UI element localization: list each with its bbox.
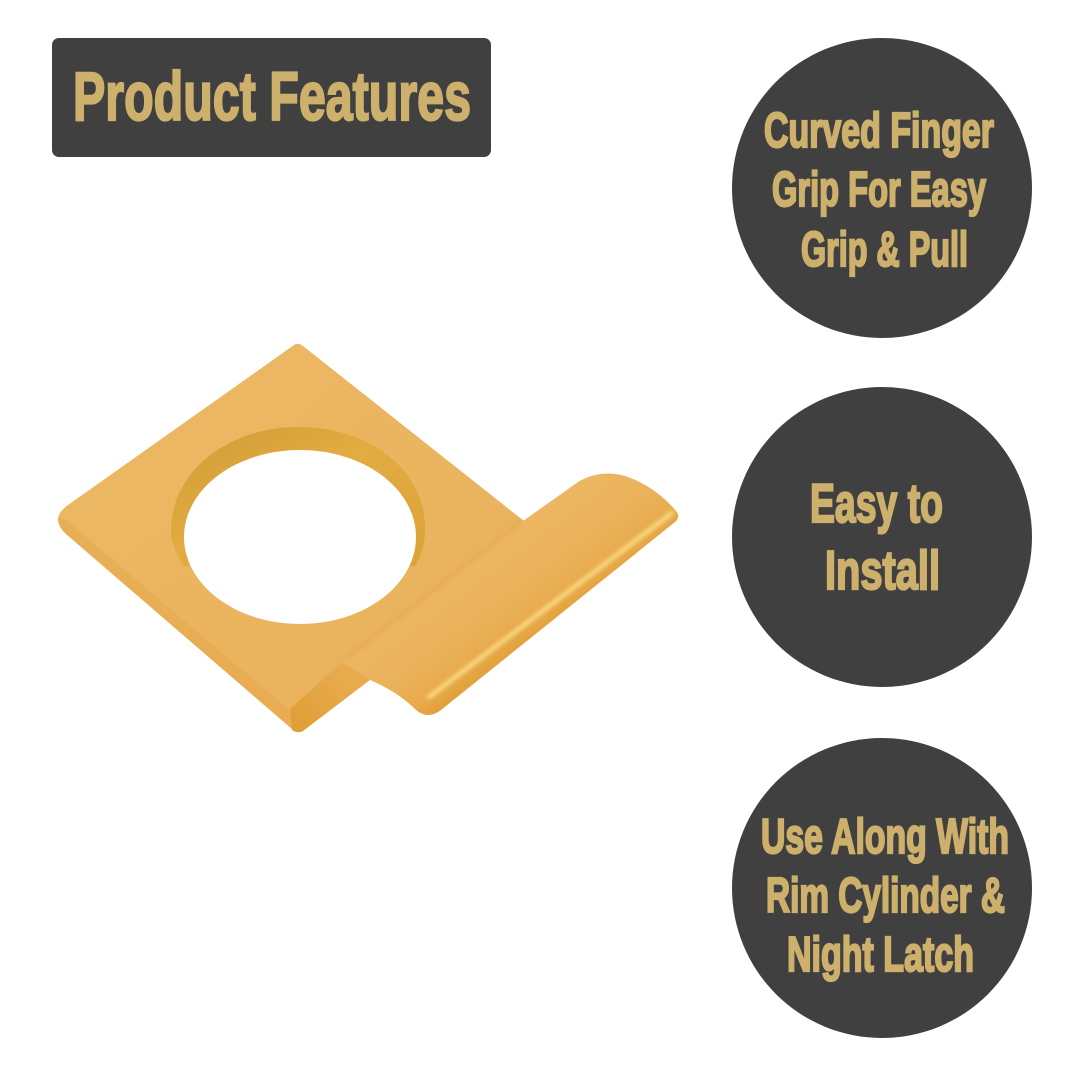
feature text: curved finger grip: Grip & Pull bbox=[801, 223, 968, 277]
product image: brass cylinder pull bbox=[58, 344, 678, 732]
feature text: curved finger grip bbox=[764, 104, 994, 277]
feature text: use with rim cylinder bbox=[761, 810, 1009, 982]
title: Product Features bbox=[73, 58, 471, 135]
handle highlight bbox=[429, 513, 672, 697]
feature circle: curved finger grip bbox=[732, 38, 1032, 338]
feature text: use with rim cylinder: Night Latch bbox=[787, 928, 974, 982]
feature text: easy to install: Easy to bbox=[810, 472, 943, 534]
crease line bbox=[345, 521, 523, 660]
feature text: easy to install: Install bbox=[825, 539, 940, 601]
feature text: easy to install bbox=[810, 472, 943, 601]
title banner bbox=[52, 38, 491, 157]
round hole bbox=[184, 450, 416, 624]
plate lower edge bbox=[59, 517, 292, 729]
feature circle: use with rim cylinder bbox=[732, 738, 1032, 1038]
recess of the round hole bbox=[171, 427, 425, 566]
fold below handle bbox=[290, 662, 370, 732]
finger grip handle bbox=[342, 474, 678, 715]
feature circle: easy to install bbox=[732, 387, 1032, 687]
plate bbox=[58, 344, 524, 732]
